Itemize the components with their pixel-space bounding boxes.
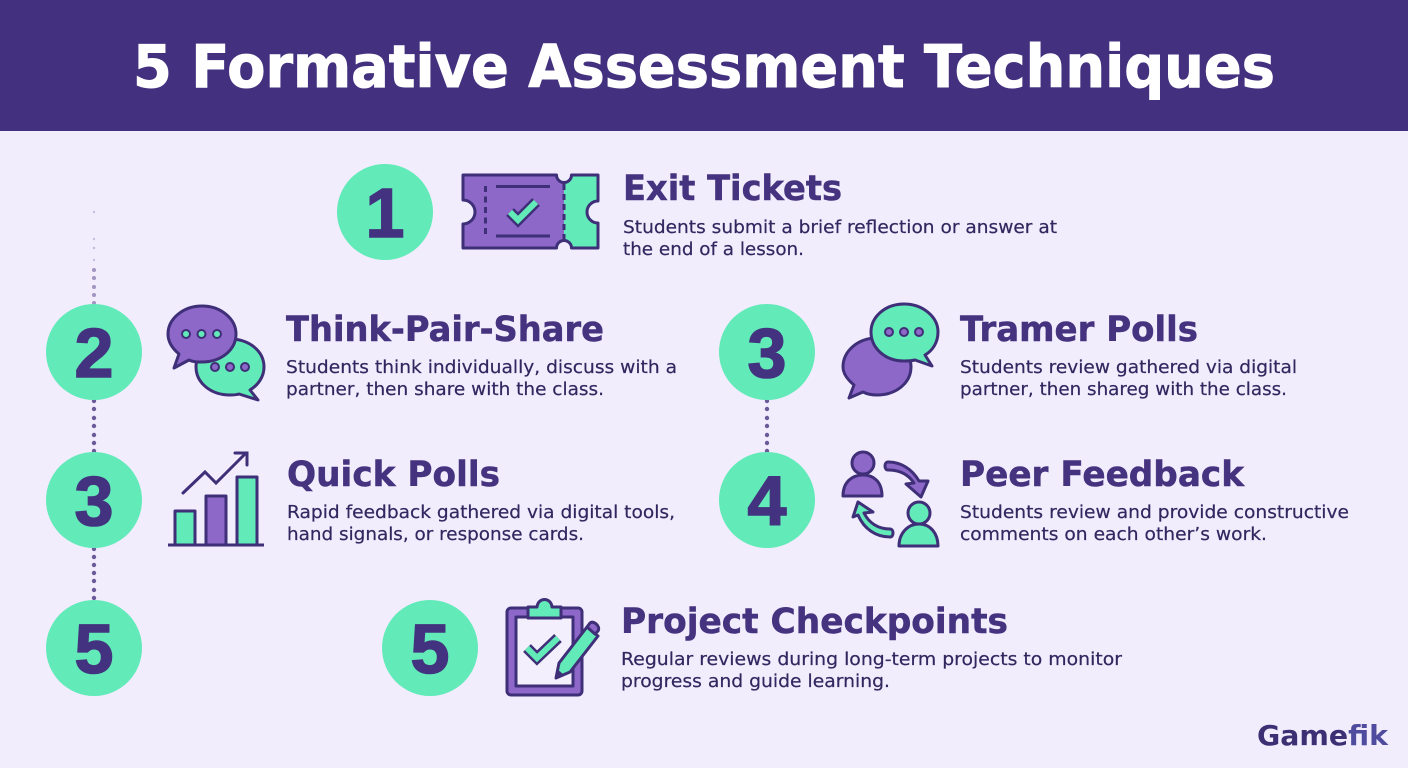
number badge 1	[337, 164, 433, 260]
item 5: Project Checkpoints	[382, 600, 1123, 696]
header banner	[0, 0, 1408, 131]
icon: chat bubbles swapped	[843, 304, 938, 398]
heading: Project Checkpoints: Project Checkpoints	[621, 602, 1008, 642]
number badge 3 left: 3	[75, 462, 113, 540]
description: Think-Pair-Share: Students think individually, discuss with a	[286, 357, 677, 378]
description: Think-Pair-Share	[286, 357, 677, 400]
item 4: Peer Feedback	[719, 452, 1349, 548]
description: Exit Tickets	[623, 217, 1057, 260]
description: Project Checkpoints: progress and guide learning.	[621, 671, 890, 692]
item 2: Think-Pair-Share	[46, 304, 677, 400]
connector: 3 to 5	[92, 547, 96, 600]
item: left badge 5	[46, 600, 142, 696]
description: Quick Polls	[287, 502, 675, 545]
logo: Gamefik: Gamefik	[1257, 719, 1389, 752]
item 1: Exit Tickets	[337, 164, 1057, 260]
connector: 2 to 3	[92, 399, 96, 453]
description: Tramer Polls: Students review gathered via digital	[960, 357, 1297, 378]
number badge 1: 1	[366, 174, 404, 252]
number badge 2: 2	[75, 314, 113, 392]
icon: clipboard with check and pencil	[507, 600, 599, 695]
icon: ticket	[463, 175, 598, 248]
number badge 3 right	[719, 304, 815, 400]
connector: left column top fading dots	[92, 211, 96, 305]
icon: peers exchanging feedback	[843, 452, 938, 546]
icon: two chat bubbles	[168, 306, 264, 400]
number badge 3 right: 3	[748, 314, 786, 392]
heading: Exit Tickets: Exit Tickets	[623, 169, 842, 209]
description: Peer Feedback: Students review and provide constructive	[960, 502, 1349, 523]
number badge 3 left	[46, 452, 142, 548]
description: Project Checkpoints	[621, 649, 1123, 692]
heading: Quick Polls: Quick Polls	[287, 455, 500, 495]
description: Project Checkpoints: Regular reviews during long-term projects to monitor	[621, 649, 1123, 670]
number badge 5	[382, 600, 478, 696]
item: Quick Polls	[46, 452, 675, 548]
description: Peer Feedback	[960, 502, 1349, 545]
description: Tramer Polls: partner, then shareg with the class.	[960, 379, 1287, 400]
icon: bar chart with rising arrow	[168, 453, 264, 545]
number badge 4	[719, 452, 815, 548]
connector: right 3 to 4	[765, 399, 769, 453]
number badge 2	[46, 304, 142, 400]
heading: Tramer Polls: Tramer Polls	[960, 310, 1198, 350]
description: Exit Tickets: Students submit a brief reflection or answer at	[623, 217, 1057, 238]
number badge 5: 5	[411, 610, 449, 688]
description: Exit Tickets: the end of a lesson.	[623, 239, 804, 260]
description: Peer Feedback: comments on each other’s work.	[960, 524, 1267, 545]
number badge 4: 4	[748, 462, 787, 540]
item: left badge 5: 5	[75, 610, 113, 688]
description: Think-Pair-Share: partner, then share with the class.	[286, 379, 604, 400]
heading: Peer Feedback: Peer Feedback	[960, 455, 1245, 495]
description: Tramer Polls	[960, 357, 1297, 400]
title: 5 Formative Assessment Techniques	[133, 32, 1275, 101]
item 3: Tramer Polls	[719, 304, 1297, 400]
description: Quick Polls: hand signals, or response cards.	[287, 524, 584, 545]
heading: Think-Pair-Share: Think-Pair-Share	[286, 310, 604, 350]
description: Quick Polls: Rapid feedback gathered via digital tools,	[287, 502, 675, 523]
